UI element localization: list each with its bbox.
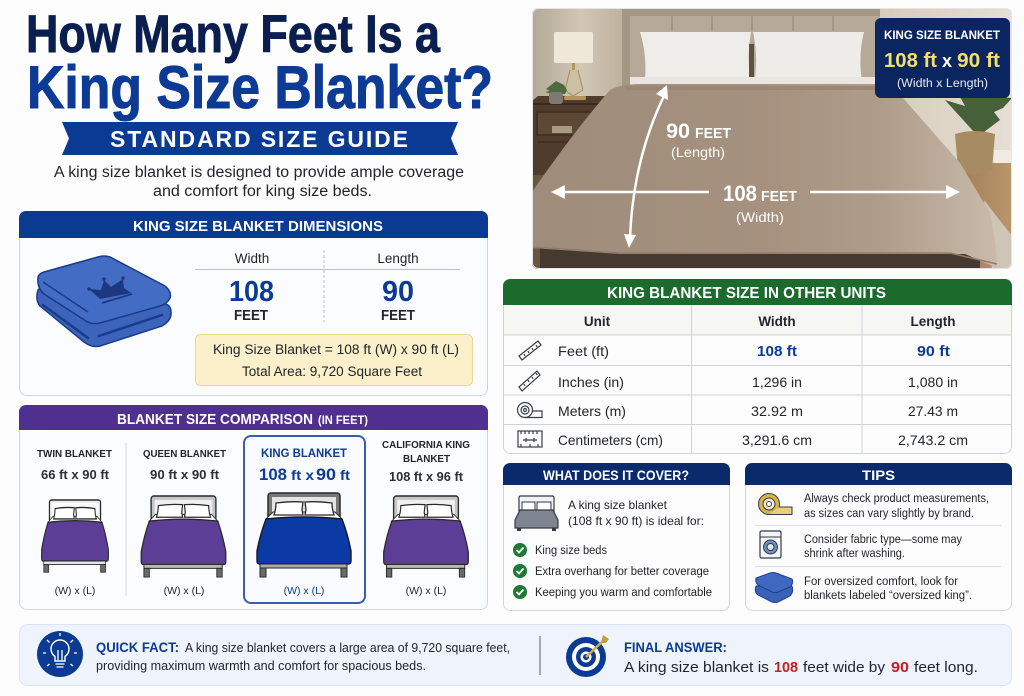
callout: total area (196, 334, 472, 386)
title: King Size Blanket? (27, 54, 493, 121)
icon: target with arrow (566, 635, 609, 677)
text: quick fact (96, 639, 510, 673)
dimension table (195, 250, 460, 324)
text: ideal for (568, 498, 704, 528)
icon: ruler (519, 341, 541, 360)
checklist: Keeping you warm and comfortable (535, 587, 712, 599)
card: california king (382, 439, 470, 597)
panel header: (IN FEET) (318, 415, 368, 427)
card: king (highlighted): ft (340, 467, 350, 483)
row: meters (518, 402, 958, 419)
panel header: TIPS (862, 468, 895, 483)
row: meters: 27.43 m (908, 403, 958, 419)
card: california king: 108 ft x 96 ft (389, 469, 464, 484)
subtitle: and comfort for king size beds. (153, 183, 372, 200)
dimension table: FEET (381, 307, 415, 324)
card: queen (141, 448, 227, 597)
label: 108 feet width: 108 (723, 181, 757, 206)
dimension table: FEET (234, 307, 268, 324)
row: meters: Meters (m) (558, 403, 626, 419)
panel: size in other units (503, 279, 1012, 454)
row: centimeters (518, 431, 968, 448)
right plant and pot (945, 97, 1012, 174)
panel header (503, 279, 1012, 305)
badge: size summary: 90 ft (957, 50, 1000, 72)
bed frame (540, 248, 980, 268)
card: queen: QUEEN BLANKET (143, 448, 227, 460)
row: centimeters: 3,291.6 cm (742, 432, 812, 448)
row: feet: Feet (ft) (558, 343, 609, 359)
card: king (highlighted): 90 (316, 465, 336, 484)
table header row: Length (910, 314, 956, 329)
dimension table: Length (377, 251, 419, 266)
pillows (630, 32, 875, 85)
lamp (554, 32, 593, 100)
card: california king: (W) x (L) (406, 585, 446, 597)
text: final answer: FINAL ANSWER: (624, 640, 727, 655)
text: final answer: feet long. (914, 659, 978, 676)
card: twin: TWIN BLANKET (37, 448, 113, 460)
tip: oversized blanket: blankets labeled “oversized king”. (804, 590, 972, 602)
text: final answer: A king size blanket is (624, 659, 769, 676)
icon: twin bed (42, 500, 108, 572)
icon: tape ruler (519, 371, 540, 391)
blanket (532, 84, 997, 268)
card: king (highlighted): 108 (259, 465, 287, 484)
panel header: KING BLANKET SIZE IN OTHER UNITS (607, 285, 886, 302)
text: final answer: 90 (891, 659, 909, 676)
small plant (545, 81, 567, 104)
row: feet: 90 ft (917, 343, 950, 360)
panel: king size blanket dimensions (19, 211, 488, 396)
tip: washing machine: Consider fabric type—some may (804, 534, 962, 546)
text: ideal for: (108 ft x 90 ft) is ideal for: (568, 514, 704, 528)
label: 108 feet width: (Width) (736, 209, 784, 225)
panel header (19, 211, 488, 238)
table header row: Unit (584, 314, 611, 329)
table header row (584, 314, 956, 329)
card: california king: CALIFORNIA KING (382, 439, 470, 451)
checklist: King size beds (535, 545, 607, 557)
text: final answer (624, 640, 978, 676)
card: queen: 90 ft x 90 ft (150, 467, 220, 482)
badge: size summary: KING SIZE BLANKET (884, 30, 1000, 42)
text: quick fact: QUICK FACT: (96, 639, 179, 655)
table header row: Width (758, 314, 796, 329)
card: twin: 66 ft x 90 ft (41, 467, 110, 482)
row: inches: 1,080 in (908, 374, 958, 390)
label: 90 feet length: 90 (666, 120, 690, 143)
tip: oversized blanket (755, 572, 972, 602)
icon: california king bed (384, 496, 468, 577)
checklist (513, 543, 712, 599)
label: 90 feet length (666, 120, 731, 160)
panel: tips (745, 463, 1012, 610)
icon: queen bed (141, 496, 226, 577)
panel header: WHAT DOES IT COVER? (543, 468, 689, 483)
callout: total area: King Size Blanket = 108 ft (W) x 90 ft (L) (213, 342, 459, 357)
text: final answer: 108 (774, 659, 798, 676)
badge: size summary (875, 18, 1010, 98)
photo: king bed with measurements (532, 8, 1014, 269)
title: How Many Feet Is a (26, 5, 440, 64)
nightstand (532, 96, 605, 175)
card: king (highlighted): KING BLANKET (261, 446, 348, 460)
tip: washing machine (760, 531, 962, 560)
tip: tape measure: as sizes can vary slightly by brand. (804, 508, 974, 520)
icon: light bulb (37, 631, 83, 677)
badge: size summary: x (942, 51, 952, 71)
banner: standard size guide: STANDARD SIZE GUIDE (110, 126, 408, 152)
row: feet: 108 ft (757, 343, 797, 360)
text: quick fact: providing maximum warmth and comfort for spacious beds. (96, 659, 426, 673)
row: centimeters: 2,743.2 cm (898, 432, 968, 448)
card: king (highlighted): ft x (291, 467, 314, 483)
label: 108 feet width: FEET (761, 188, 797, 205)
checklist: Extra overhang for better coverage (535, 566, 709, 578)
row: centimeters: Centimeters (cm) (558, 432, 663, 448)
icon: folded blanket with crown (37, 256, 171, 346)
icon: king bed (257, 493, 351, 577)
card: king (highlighted): (W) x (L) (284, 585, 324, 597)
text: quick fact: A king size blanket covers a large area of 9,720 square feet, (185, 641, 510, 655)
row: inches: Inches (in) (558, 374, 624, 390)
panel header: KING SIZE BLANKET DIMENSIONS (133, 218, 383, 235)
row: inches: 1,296 in (752, 374, 802, 390)
dimension table: Width (235, 251, 269, 266)
headboard (622, 8, 880, 86)
callout: total area: Total Area: 9,720 Square Feet (242, 364, 422, 379)
card: king (highlighted) (244, 436, 365, 603)
text: ideal for: A king size blanket (568, 498, 668, 512)
dimension table: 90 (382, 276, 414, 308)
title (26, 5, 493, 121)
row: inches (519, 371, 958, 391)
card: california king: BLANKET (403, 453, 451, 465)
panel: what does it cover (503, 463, 730, 610)
panel header (745, 463, 1012, 485)
badge: size summary: (Width x Length) (897, 78, 988, 90)
card: queen: (W) x (L) (164, 585, 204, 597)
dimension table: 108 (229, 276, 274, 308)
row: feet (519, 341, 950, 360)
badge: size summary: 108 ft (884, 50, 937, 72)
icon: tape roll (518, 402, 542, 418)
label: 108 feet width (723, 181, 797, 225)
arrow: length (624, 85, 668, 248)
panel header: BLANKET SIZE COMPARISON (117, 411, 313, 428)
subtitle (54, 164, 464, 200)
banner: standard size guide (62, 122, 458, 155)
label: 90 feet length: (Length) (671, 144, 725, 160)
subtitle: A king size blanket is designed to provide ample coverage (54, 164, 464, 181)
tip: washing machine: shrink after washing. (804, 548, 905, 560)
panel: blanket size comparison (19, 405, 488, 610)
card: twin (37, 448, 113, 597)
panel: bottom facts (20, 624, 1012, 686)
row: meters: 32.92 m (751, 403, 803, 419)
arrow: width (551, 185, 960, 199)
label: 90 feet length: FEET (695, 125, 731, 142)
icon: bed (515, 496, 558, 531)
icon: measuring grid (518, 431, 542, 447)
tip: oversized blanket: For oversized comfort, look for (804, 576, 958, 588)
tip: tape measure (758, 493, 989, 520)
panel header (503, 463, 730, 485)
tip: tape measure: Always check product measurements, (804, 493, 989, 505)
panel header (19, 405, 488, 430)
text: final answer: feet wide by (803, 659, 886, 676)
card: twin: (W) x (L) (55, 585, 95, 597)
